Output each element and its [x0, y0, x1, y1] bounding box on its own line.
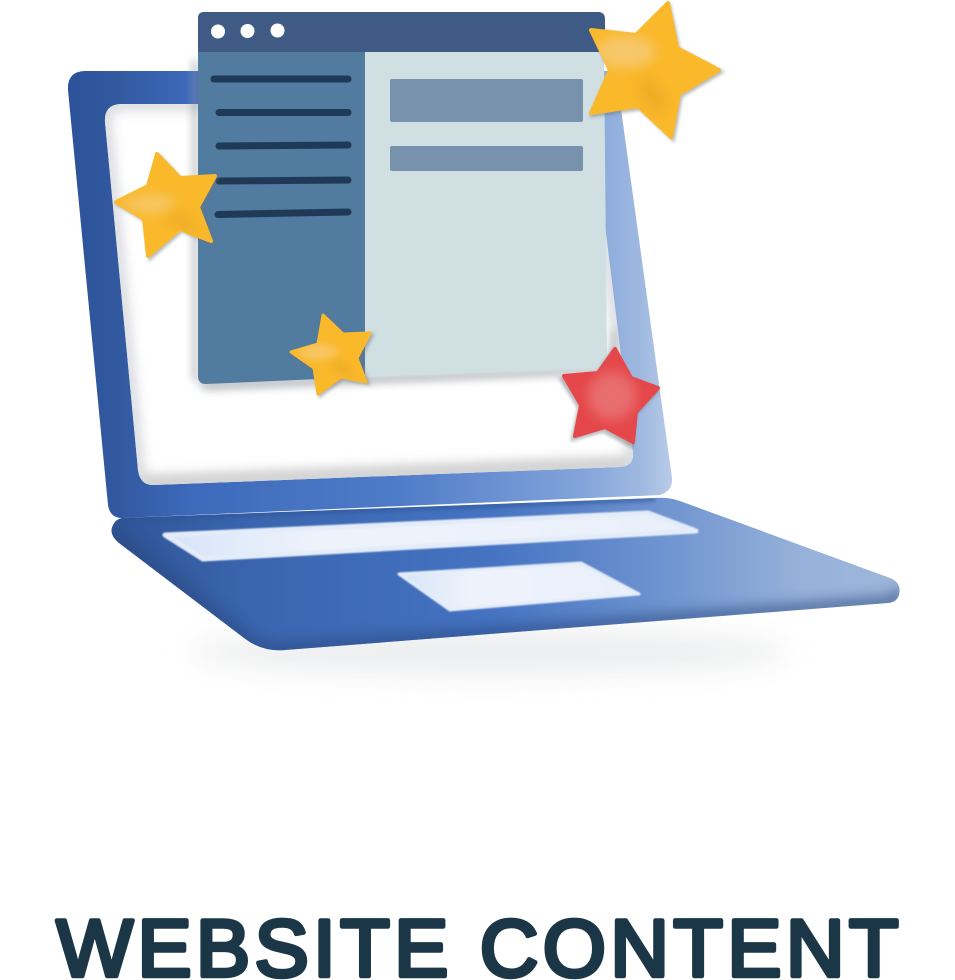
star shadows — [115, 3, 724, 448]
content block small — [390, 146, 583, 171]
base edge shading — [112, 499, 900, 650]
laptop screen — [105, 104, 633, 485]
laptop illustration — [68, 71, 900, 650]
star: bottom gold — [291, 315, 370, 394]
browser window — [198, 12, 607, 384]
star: red — [564, 349, 658, 442]
keyboard area — [165, 513, 696, 559]
browser window shadow — [192, 60, 616, 391]
trackpad — [399, 563, 639, 610]
ground shadow — [190, 630, 790, 674]
sidebar text lines — [214, 79, 348, 214]
content block large — [390, 79, 583, 122]
window title bar — [198, 12, 605, 52]
star: left gold — [116, 154, 215, 256]
laptop lid — [68, 71, 672, 518]
screen inner shading — [105, 104, 633, 485]
window content pane — [365, 50, 607, 377]
laptop base — [111, 498, 900, 650]
star: top right gold — [591, 3, 719, 137]
window sidebar — [198, 50, 365, 384]
window control dots — [211, 24, 284, 38]
